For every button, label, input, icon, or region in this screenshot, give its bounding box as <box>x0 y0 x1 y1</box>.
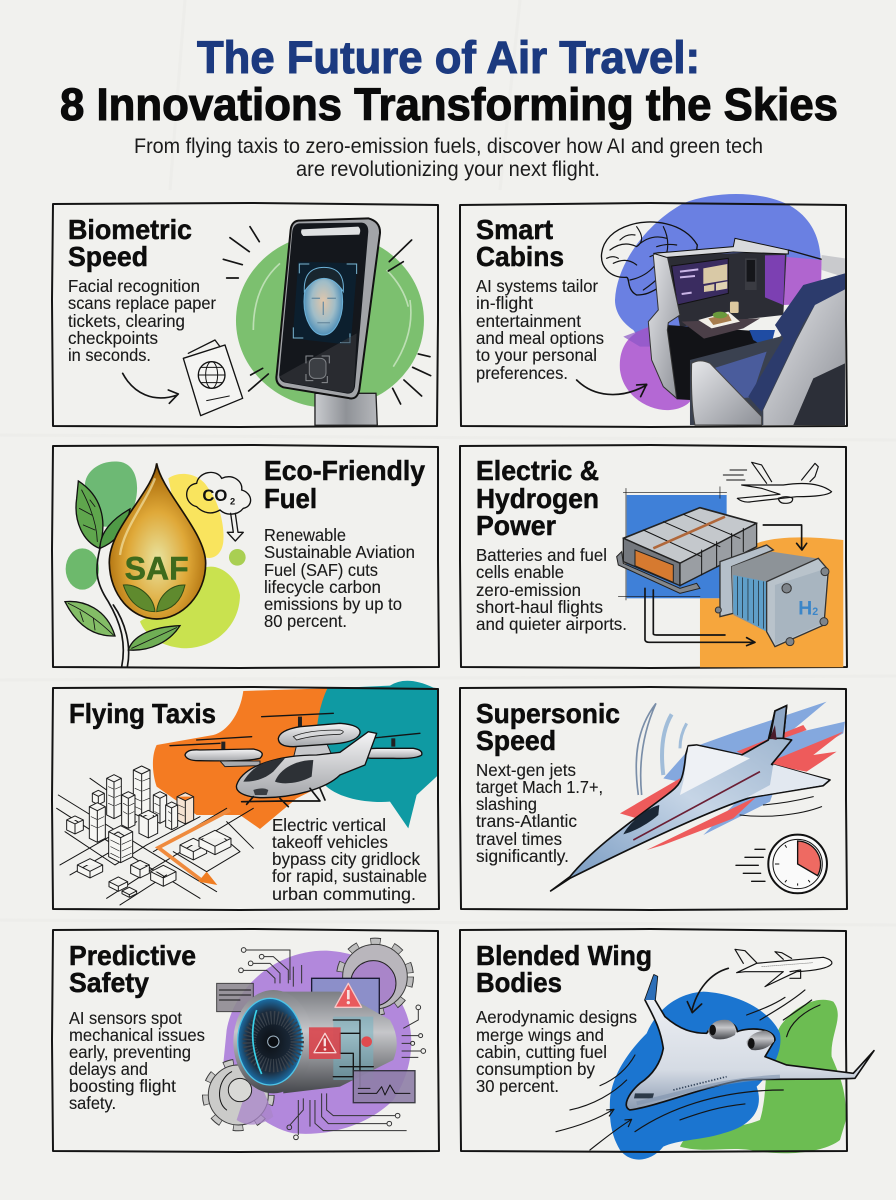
illustration: city map <box>57 766 253 905</box>
body text: merge wings and <box>476 1025 604 1045</box>
body text: early, preventing <box>69 1042 191 1062</box>
body text: Electric vertical <box>272 815 386 835</box>
background blobs <box>610 992 846 1160</box>
frame <box>460 203 847 427</box>
heading: Smart <box>476 214 553 245</box>
body text: cabin, cutting fuel <box>476 1042 607 1062</box>
body text: urban commuting. <box>272 884 416 904</box>
body text: AI sensors spot <box>69 1008 182 1028</box>
illustration: SAF fuel drop and plant: CO <box>202 486 227 505</box>
heading: Supersonic <box>476 698 620 729</box>
body text: preferences. <box>476 363 568 383</box>
panel: Biometric Speed <box>52 203 438 427</box>
background blobs <box>153 681 439 829</box>
body text: significantly. <box>476 846 569 866</box>
illustration: battery pack and hydrogen cell: 2 <box>812 606 818 618</box>
illustration: eVTOL aircraft <box>170 713 422 807</box>
panel: Eco-Friendly Fuel <box>52 445 439 668</box>
body text: travel times <box>476 829 562 849</box>
body text <box>476 276 604 383</box>
illustration: blended wing aircraft <box>556 949 874 1150</box>
body text <box>264 525 415 631</box>
body text: in seconds. <box>68 345 151 365</box>
heading: Blended Wing <box>476 940 652 971</box>
panel: Electric and Hydrogen Power <box>460 445 847 668</box>
body text: 80 percent. <box>264 611 347 631</box>
title <box>60 32 838 130</box>
background blobs <box>615 194 822 410</box>
body text: slashing <box>476 794 537 814</box>
body text: scans replace paper <box>68 293 216 313</box>
heading: Fuel <box>264 483 317 514</box>
heading <box>68 214 192 272</box>
body text: mechanical issues <box>69 1025 205 1045</box>
heading <box>264 455 425 514</box>
body text: safety. <box>69 1093 116 1113</box>
body text: and quieter airports. <box>476 614 627 634</box>
illustration: battery pack and hydrogen cell <box>617 462 843 667</box>
body text: Facial recognition <box>68 276 200 296</box>
body text: 30 percent. <box>476 1076 559 1096</box>
heading: Speed <box>68 241 148 272</box>
heading: Flying Taxis <box>69 698 216 729</box>
title: 8 Innovations Transforming the Skies <box>60 79 838 130</box>
subtitle <box>134 135 763 181</box>
illustration: supersonic jet and clock <box>551 702 845 893</box>
body text: Batteries and fuel <box>476 545 607 565</box>
panel: Flying Taxis <box>52 681 439 910</box>
heading: Power <box>476 510 556 541</box>
body text <box>272 815 427 904</box>
body text: Aerodynamic designs <box>476 1007 637 1027</box>
heading <box>476 455 599 541</box>
illustration: engine with AI diagnostics <box>206 942 426 1140</box>
body text: Renewable <box>264 525 346 545</box>
body text: takeoff vehicles <box>272 832 388 852</box>
body text: checkpoints <box>68 328 158 348</box>
illustration: biometric kiosk <box>123 218 431 425</box>
subtitle: From flying taxis to zero-emission fuels, discover how AI and green tech <box>134 135 763 158</box>
body text: emissions by up to <box>264 594 402 614</box>
body text <box>68 276 216 365</box>
body text: entertainment <box>476 311 581 331</box>
body text: in-flight <box>476 293 533 313</box>
frame <box>52 445 439 668</box>
body text: target Mach 1.7+, <box>476 777 603 797</box>
heading: Eco-Friendly <box>264 455 425 486</box>
heading: Hydrogen <box>476 483 599 514</box>
frame <box>52 203 438 427</box>
body text: for rapid, sustainable <box>272 866 427 886</box>
heading <box>69 940 196 998</box>
illustration: SAF fuel drop and plant: 2 <box>230 496 235 506</box>
panel: Blended Wing Bodies <box>460 929 874 1160</box>
body text: and meal options <box>476 328 604 348</box>
frame <box>52 687 439 910</box>
body text: Sustainable Aviation <box>264 542 415 562</box>
body text: AI systems tailor <box>476 276 598 296</box>
panel: Predictive Safety <box>52 929 439 1152</box>
illustration: SAF fuel drop and plant: SAF <box>125 550 189 586</box>
body text: to your personal <box>476 345 597 365</box>
illustration: battery pack and hydrogen cell: H <box>798 598 812 619</box>
body text <box>476 545 627 634</box>
illustration: brain and cabin seat <box>577 222 845 425</box>
body text: bypass city gridlock <box>272 849 420 869</box>
body text: tickets, clearing <box>68 311 185 331</box>
heading: Cabins <box>476 241 564 272</box>
title: The Future of Air Travel: <box>197 32 700 83</box>
panel: Smart Cabins <box>460 194 847 427</box>
heading: Predictive <box>69 940 196 971</box>
body text: Next-gen jets <box>476 760 576 780</box>
heading: Safety <box>69 967 149 998</box>
heading <box>476 214 564 272</box>
frame <box>460 445 847 668</box>
body text: short-haul flights <box>476 597 603 617</box>
panel: Supersonic Speed <box>460 687 847 910</box>
body text <box>476 1007 637 1096</box>
heading: Electric & <box>476 455 599 486</box>
body text: delays and <box>69 1059 148 1079</box>
heading <box>476 940 652 998</box>
heading: Bodies <box>476 967 562 998</box>
body text: trans-Atlantic <box>476 811 577 831</box>
body text: zero-emission <box>476 580 581 600</box>
heading: Speed <box>476 725 556 756</box>
heading <box>476 698 620 756</box>
frame <box>460 929 847 1152</box>
body text <box>476 760 603 866</box>
frame <box>52 929 439 1152</box>
frame <box>460 687 847 910</box>
body text: Fuel (SAF) cuts <box>264 560 378 580</box>
body text <box>69 1008 205 1113</box>
body text: consumption by <box>476 1059 595 1079</box>
subtitle: are revolutionizing your next flight. <box>296 158 600 181</box>
illustration: SAF fuel drop and plant <box>65 462 251 667</box>
body text: boosting flight <box>69 1076 176 1096</box>
heading: Biometric <box>68 214 192 245</box>
body text: lifecycle carbon <box>264 577 381 597</box>
body text: cells enable <box>476 562 564 582</box>
